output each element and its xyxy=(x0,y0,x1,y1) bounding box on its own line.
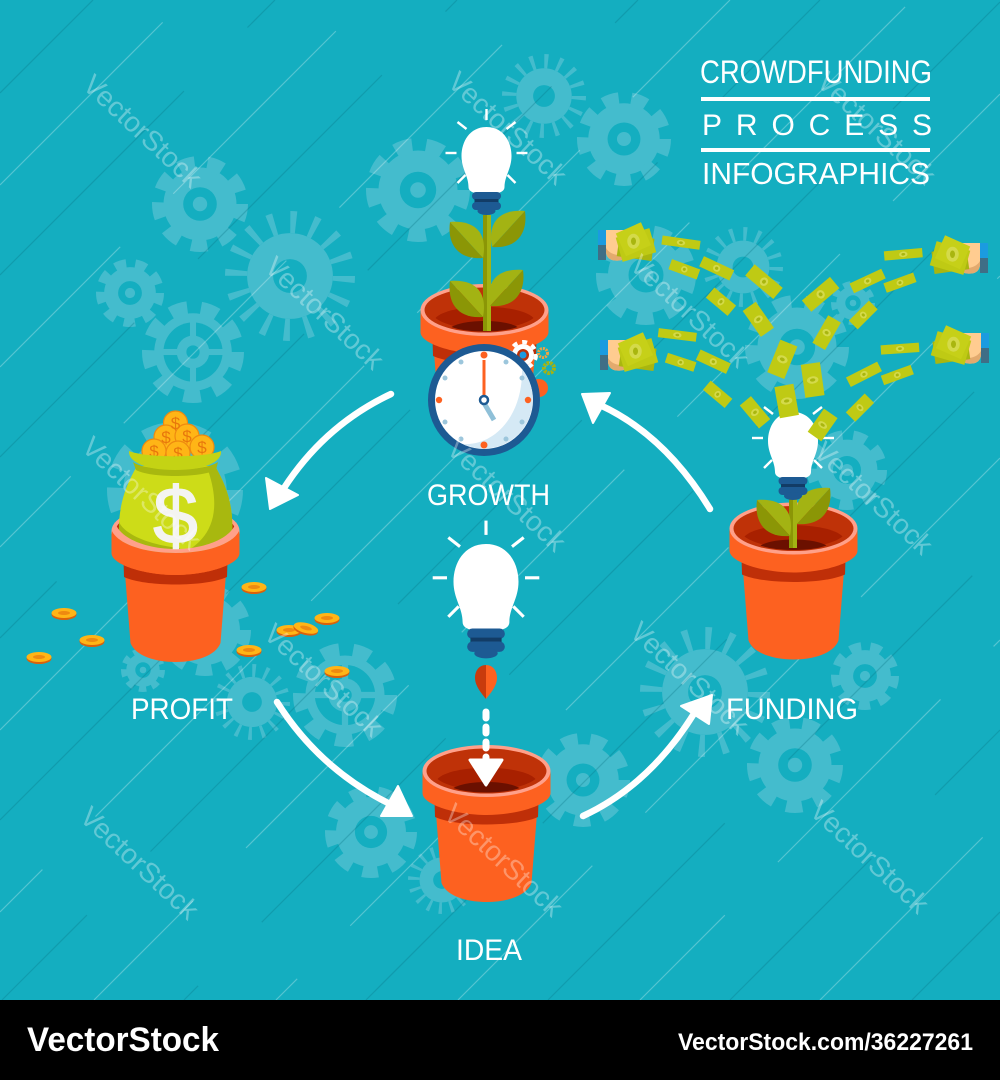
lightbulb: funding xyxy=(752,394,834,500)
watermarks: VectorStock xyxy=(259,251,391,376)
lightbulb: growth xyxy=(446,109,528,215)
watermarks: VectorStock xyxy=(624,616,756,741)
watermarks: VectorStock xyxy=(442,66,574,191)
title block: CROWDFUNDING xyxy=(700,54,932,90)
footer bar xyxy=(0,1000,1000,1080)
footer url: VectorStock.com/36227261 xyxy=(678,1029,973,1056)
hands with money xyxy=(598,222,989,372)
label: idea: IDEA xyxy=(456,934,522,967)
watermarks: VectorStock xyxy=(74,801,206,926)
watermarks: VectorStock xyxy=(258,618,390,743)
watermarks xyxy=(74,66,943,926)
title block xyxy=(700,54,932,191)
stage: growth plant and clock xyxy=(420,109,554,456)
stem and leaves xyxy=(757,488,830,548)
coin pile: $ xyxy=(197,438,207,457)
flying banknotes xyxy=(658,236,923,441)
arrow: idea to funding xyxy=(583,695,712,816)
watermarks: VectorStock xyxy=(76,431,208,556)
stage: idea lightbulb with seed xyxy=(433,521,539,699)
arrow: profit to idea xyxy=(277,702,412,816)
scattered coins xyxy=(26,582,350,678)
label: profit: PROFIT xyxy=(131,693,233,726)
small gears beside clock xyxy=(510,342,554,397)
coin pile: $ xyxy=(171,414,181,433)
label: funding: FUNDING xyxy=(726,693,858,726)
stage: profit pot with money bag xyxy=(26,411,350,678)
arrow: growth to profit xyxy=(266,394,391,509)
coin pile: $ xyxy=(149,442,159,461)
watermarks: VectorStock xyxy=(438,798,570,923)
pot: profit xyxy=(112,505,240,662)
pot: growth xyxy=(420,284,548,374)
seed xyxy=(475,665,497,699)
coin pile: $ xyxy=(161,428,171,447)
stage: funding pot and plant xyxy=(730,394,858,660)
clock xyxy=(428,344,540,456)
watermarks: VectorStock xyxy=(77,69,209,194)
label: growth: GROWTH xyxy=(427,479,550,512)
coin pile: $ xyxy=(173,444,183,463)
stem and leaves xyxy=(450,211,525,331)
background gears xyxy=(101,61,894,908)
coin pile xyxy=(142,411,214,465)
coin pile: $ xyxy=(182,427,192,446)
rim front xyxy=(112,531,239,575)
watermarks: VectorStock xyxy=(808,436,940,561)
title block: PROCESS xyxy=(702,109,932,142)
watermarks: VectorStock xyxy=(441,433,573,558)
dollar sign on bag: $ xyxy=(153,471,198,560)
pot: idea xyxy=(422,745,550,902)
pot: funding xyxy=(730,502,858,660)
footer brand: VectorStock xyxy=(27,1021,219,1059)
money bag xyxy=(119,451,232,560)
watermarks: VectorStock xyxy=(804,795,936,920)
lightbulb: idea xyxy=(433,521,539,658)
watermarks: VectorStock xyxy=(811,66,943,191)
arrow: funding to growth xyxy=(582,393,710,509)
dashed arrow into pot xyxy=(470,712,502,785)
watermarks: VectorStock xyxy=(624,249,756,374)
title block: INFOGRAPHICS xyxy=(702,156,930,191)
